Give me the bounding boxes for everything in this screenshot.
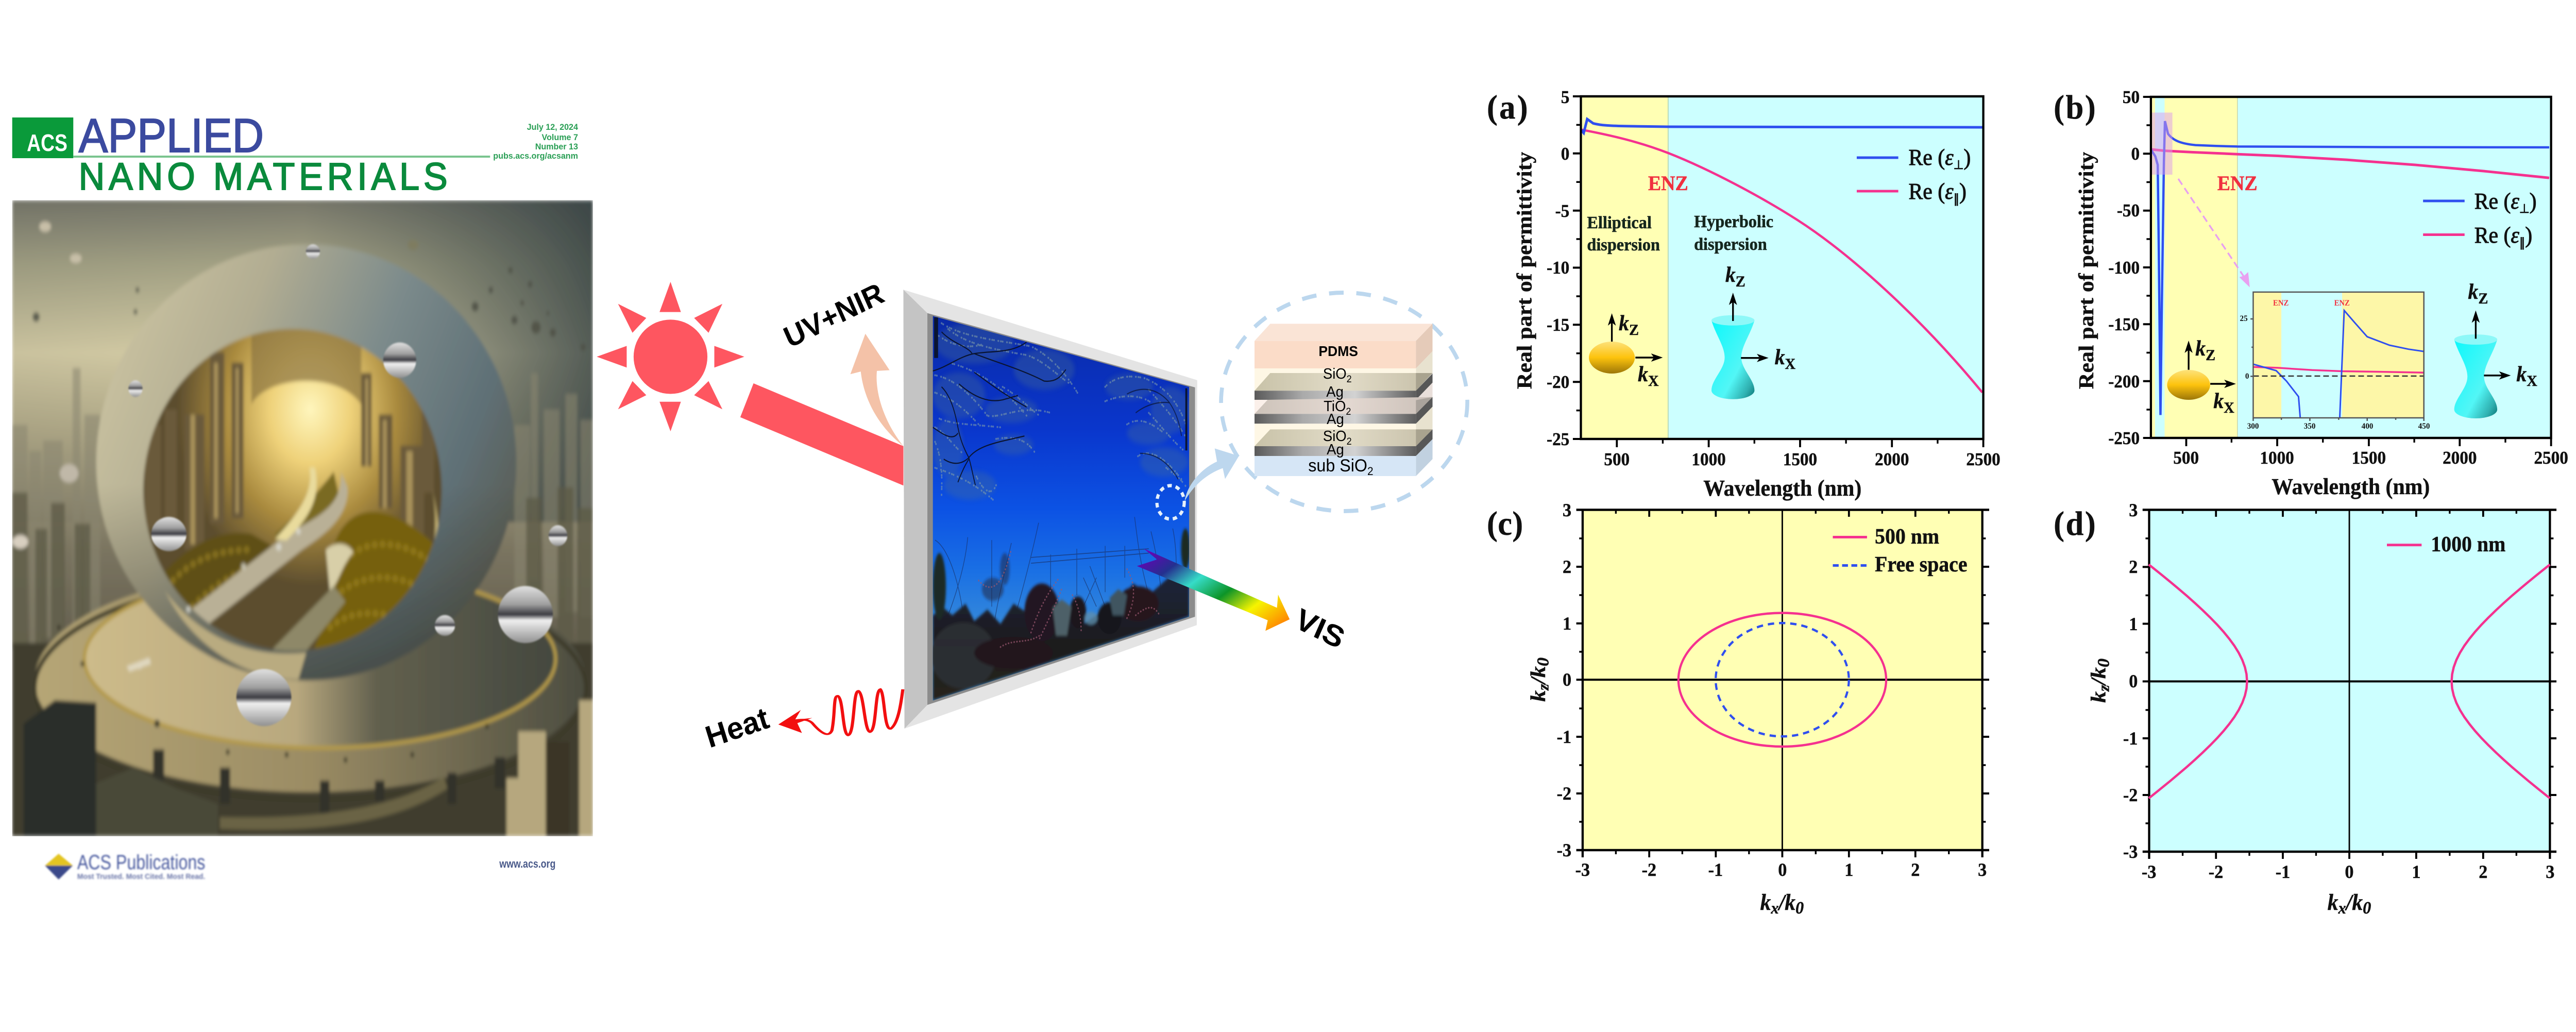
chart d x-axis title: x [2338, 899, 2346, 917]
chart d hyperbola curves [2149, 565, 2550, 798]
chart (b): permittivity vs wavelength with inset [2054, 88, 2568, 499]
chart a x-axis tick labels: 1500 [1783, 450, 1817, 469]
chart a x-axis tick labels: 500 [1604, 450, 1630, 469]
chart d x-axis tick labels: 0 [2345, 861, 2353, 882]
stack layer labels: Ag [1327, 441, 1344, 458]
cover issue details [73, 122, 579, 161]
icon: hyperbolic isofrequency surface, b: k [2516, 362, 2527, 386]
chart a y-axis tick labels [1547, 88, 1569, 449]
chart d legend: 1000 nm [2431, 532, 2505, 556]
chart b y-axis tick labels [2108, 88, 2140, 448]
icon: elliptical isofrequency surface: k [1638, 362, 1648, 386]
tree branches [933, 317, 1187, 485]
chart a x-axis tick labels: 2000 [1875, 450, 1909, 469]
chart a region labels: Hyperbolic [1694, 212, 1773, 231]
chart a legend [1857, 145, 1971, 206]
chart a y-axis tick labels: -15 [1547, 315, 1569, 335]
dashed circle around layer stack [1221, 293, 1467, 511]
label: VIS: VIS [1291, 602, 1350, 655]
stack layer labels: 2 [1346, 406, 1351, 417]
icon: elliptical isofrequency surface: k [1619, 311, 1629, 335]
inset ENZ labels: ENZ [2334, 299, 2350, 308]
chart b frame and ticks [2143, 97, 2551, 446]
chart b y-axis tick labels: -50 [2117, 201, 2140, 221]
label: Heat: Heat [701, 701, 773, 755]
chart d x-axis title: k [2328, 890, 2338, 915]
chart d x-axis tick labels: -2 [2209, 861, 2223, 882]
panel letter b: (b) [2054, 89, 2096, 126]
inset tick labels: 350 [2304, 422, 2316, 431]
icon: elliptical isofrequency surface, b: k [2213, 389, 2224, 413]
icon: elliptical isofrequency surface: Z [1629, 322, 1639, 339]
cover website: www.acs.org [499, 858, 555, 870]
stack layer labels: PDMS [1318, 343, 1358, 359]
chart b curves [2151, 121, 2549, 415]
chart a region labels: dispersion [1694, 234, 1767, 254]
chart d x-axis tick labels: 3 [2546, 861, 2554, 882]
chart a legend: ) [1959, 179, 1967, 204]
arrow: thermal radiation wave [778, 689, 903, 735]
chart a curves [1581, 119, 1982, 393]
chart d y-axis title: /k [2087, 667, 2110, 686]
inset tick labels: 450 [2418, 422, 2430, 431]
chart d x-axis tick labels: 1 [2412, 861, 2420, 882]
icon: hyperbolic isofrequency surface, b: k [2468, 280, 2478, 303]
arrow: zoom to layer stack [1185, 448, 1239, 501]
chart b y-axis title: Real part of permittivity [2075, 151, 2098, 389]
icon: hyperbolic isofrequency surface, b: X [2527, 373, 2537, 390]
chart c y-axis title: k [1527, 690, 1550, 702]
stack layer labels: 2 [1347, 374, 1352, 384]
chart c y-axis tick labels: -1 [1557, 726, 1571, 747]
chart d y-axis tick labels: 1 [2129, 614, 2138, 634]
chart a region labels: dispersion [1587, 235, 1660, 255]
chart a legend: Re (ε [1908, 145, 1954, 170]
chart b y-axis tick labels: -150 [2108, 315, 2140, 334]
icon: hyperbolic isofrequency surface: k [1725, 263, 1736, 286]
panel: device schematic [597, 276, 1467, 755]
icon: hyperbolic isofrequency surface [1711, 263, 1795, 399]
chart a legend: ∥ [1954, 192, 1959, 206]
chart c x-axis tick labels: 3 [1978, 859, 1987, 880]
chart d x-axis tick labels: -1 [2276, 861, 2290, 882]
chart b ENZ label: ENZ [2217, 172, 2258, 195]
icon: elliptical isofrequency surface [1589, 311, 1663, 390]
cover title: NANO MATERIALS: NANO MATERIALS [79, 156, 448, 198]
chart c x-axis tick labels: -3 [1575, 859, 1590, 880]
chart d y-axis tick labels: -1 [2123, 728, 2138, 749]
chart b legend: ∥ [2519, 236, 2525, 250]
chart c y-axis tick labels: 0 [1563, 669, 1571, 690]
chart b y-axis tick labels: 50 [2123, 88, 2140, 107]
chart d y-axis tick labels: -2 [2123, 785, 2138, 805]
cover publisher logo: Most Trusted. Most Cited. Most Read. [77, 873, 205, 881]
chart d y-axis tick labels: 3 [2129, 500, 2138, 520]
highlight: dotted sampling circle [1157, 485, 1184, 519]
chart b highlighted zoom region [2152, 112, 2173, 175]
arrow: transmitted visible light [1137, 549, 1290, 631]
chart a frame and ticks [1573, 96, 1984, 447]
inset ENZ labels [2273, 299, 2350, 308]
cover publisher logo [45, 851, 205, 881]
chart d background [2149, 510, 2550, 852]
chart c y-axis title: 0 [1534, 657, 1552, 666]
chart c y-axis tick labels: 1 [1563, 613, 1571, 634]
chart c x-axis tick labels: -2 [1642, 859, 1656, 880]
chart c background [1583, 510, 1982, 850]
chart c curves [1679, 613, 1886, 747]
chart c y-axis title: /k [1527, 666, 1550, 685]
panel: journal cover [12, 109, 593, 881]
chart b x-axis tick labels: 1500 [2352, 448, 2386, 468]
chart a legend: ⊥ [1954, 158, 1963, 172]
cover illustration: ring, city and metal spheres [12, 200, 593, 836]
bushes and ground [930, 529, 1190, 701]
chart c x-axis tick labels [1575, 859, 1987, 880]
inset tick labels: 300 [2247, 422, 2259, 431]
chart b background bands [2151, 97, 2551, 438]
chart a region labels [1587, 212, 1773, 255]
chart d x-axis tick labels: -3 [2142, 861, 2156, 882]
chart d y-axis tick labels: 2 [2129, 556, 2138, 577]
arrow: incident sunlight beam [740, 383, 903, 485]
icon: elliptical isofrequency surface, b: X [2224, 399, 2234, 416]
chart a y-axis tick labels: 0 [1561, 144, 1569, 164]
chart b dashed callout arrow [2178, 179, 2250, 287]
cover masthead green ACS box: ACS [27, 130, 67, 156]
icon: hyperbolic isofrequency surface: k [1775, 345, 1785, 369]
chart a y-axis title: Real part of permittivity [1513, 151, 1536, 389]
chart d y-axis title: 0 [2094, 658, 2113, 667]
cover issue details: pubs.acs.org/acsanm [493, 151, 578, 161]
chart b x-axis tick labels: 1000 [2260, 448, 2294, 468]
cover publisher logo: ACS Publications [77, 851, 205, 874]
chart c legend: Free space [1875, 552, 1968, 576]
chart a y-axis tick labels: 5 [1561, 88, 1569, 107]
icon: elliptical isofrequency surface: X [1648, 373, 1659, 390]
stack layer labels [1308, 343, 1374, 478]
grasses and wires [935, 517, 1177, 627]
panel letter d: (d) [2054, 505, 2096, 542]
chart b legend: Re (ε [2475, 223, 2519, 248]
chart b legend: Re (ε [2475, 189, 2519, 214]
chart c x-axis title: x [1770, 899, 1779, 917]
chart c y-axis tick labels: 2 [1563, 556, 1571, 577]
chart d x-axis title: /k [2345, 890, 2363, 915]
stack layer labels: sub SiO [1308, 456, 1367, 476]
window photo: trees against blue sky [930, 315, 1192, 702]
panel letter c: (c) [1487, 505, 1523, 542]
chart a region labels: Elliptical [1587, 213, 1652, 232]
window frame [903, 290, 1197, 729]
chart b y-axis tick labels: -250 [2108, 429, 2140, 448]
chart a y-axis tick labels: -5 [1555, 201, 1569, 221]
chart b legend: ) [2525, 223, 2532, 248]
chart c x-axis tick labels: 0 [1778, 859, 1787, 880]
chart b x-axis tick labels: 2000 [2443, 448, 2477, 468]
chart a x-axis tick labels [1604, 450, 2001, 469]
chart c y-axis tick labels [1557, 500, 1571, 860]
chart c legend [1833, 525, 1968, 576]
chart b y-axis tick labels: 0 [2131, 144, 2140, 164]
chart b y-axis tick labels: -200 [2108, 372, 2140, 392]
inset ENZ labels: ENZ [2273, 299, 2289, 308]
chart d axes and ticks [2143, 510, 2556, 859]
stack layer labels: SiO [1323, 365, 1347, 382]
label: UV+NIR: UV+NIR [779, 276, 889, 354]
icon: sun [597, 282, 744, 431]
chart a ENZ label: ENZ [1648, 172, 1688, 195]
chart b legend [2423, 189, 2537, 250]
chart b inset [2240, 292, 2430, 431]
chart c x-axis tick labels: -1 [1708, 859, 1723, 880]
icon: hyperbolic isofrequency surface, b: Z [2478, 290, 2488, 307]
chart c y-axis tick labels: -3 [1557, 840, 1571, 860]
inset tick labels: 0 [2245, 372, 2249, 381]
chart d y-axis title: z [2095, 684, 2112, 692]
icon: elliptical isofrequency surface, b [2167, 336, 2236, 416]
chart b legend: ⊥ [2519, 202, 2530, 216]
chart d x-axis tick labels: 2 [2479, 861, 2487, 882]
chart b y-axis tick labels: -100 [2108, 258, 2140, 278]
chart b x-axis tick labels: 2500 [2534, 448, 2568, 468]
cover issue details: Volume 7 [542, 132, 578, 142]
chart a x-axis tick labels: 1000 [1691, 450, 1726, 469]
chart b x-axis title: Wavelength (nm) [2272, 475, 2430, 499]
stack layer labels: SiO [1323, 427, 1347, 444]
chart a legend: ) [1963, 145, 1971, 170]
inset tick labels [2240, 314, 2430, 431]
chart c axes and ticks [1577, 510, 1989, 857]
stack layer labels: Ag [1327, 410, 1344, 427]
chart c x-axis title: /k [1777, 890, 1796, 915]
chart (c): elliptical dispersion at 500 nm [1487, 500, 1989, 918]
chart d x-axis tick labels [2142, 861, 2554, 882]
chart c y-axis tick labels: 3 [1563, 500, 1571, 520]
chart a background bands [1581, 96, 1984, 439]
cover masthead green ACS box [12, 117, 73, 158]
chart c y-axis tick labels: -2 [1557, 783, 1571, 804]
chart b x-axis tick labels [2173, 448, 2568, 468]
multilayer stack [1255, 324, 1433, 478]
stack layer labels: Ag [1326, 383, 1344, 400]
cover title: APPLIED: APPLIED [79, 109, 264, 163]
icon: hyperbolic isofrequency surface: X [1785, 356, 1795, 373]
chart d y-axis title: k [2087, 691, 2110, 703]
icon: hyperbolic isofrequency surface: Z [1736, 273, 1745, 290]
arrow: reflected UV and NIR [851, 334, 903, 446]
stack layer labels: 2 [1367, 465, 1374, 478]
chart a x-axis tick labels: 2500 [1966, 450, 2001, 469]
chart d y-axis tick labels: 0 [2129, 671, 2138, 691]
blossom speckle [979, 549, 1160, 647]
chart d y-axis tick labels [2123, 500, 2138, 862]
chart b x-axis tick labels: 500 [2173, 448, 2199, 468]
chart a y-axis tick labels: -10 [1547, 258, 1569, 278]
tree foliage speckle [935, 323, 1187, 502]
chart a legend: Re (ε [1908, 179, 1954, 204]
chart a y-axis tick labels: -20 [1547, 373, 1569, 392]
chart c x-axis title: 0 [1795, 898, 1804, 918]
chart a x-axis title: Wavelength (nm) [1703, 476, 1861, 501]
icon: elliptical isofrequency surface, b: k [2195, 336, 2206, 360]
cover issue details: July 12, 2024 [527, 122, 579, 132]
chart c legend: 500 nm [1875, 525, 1939, 548]
chart (a): permittivity vs wavelength, thin Ag film stack [1487, 88, 2001, 501]
chart a y-axis tick labels: -25 [1547, 430, 1569, 449]
tree foliage haze [933, 323, 1190, 500]
inset tick labels: 25 [2240, 314, 2248, 323]
chart c x-axis title: k [1760, 890, 1771, 915]
chart (d): hyperbolic dispersion at 1000 nm [2054, 500, 2556, 918]
stack layer labels: 2 [1347, 436, 1352, 447]
inset tick labels: 400 [2362, 422, 2374, 431]
icon: hyperbolic isofrequency surface, b [2454, 280, 2537, 418]
chart d y-axis tick labels: -3 [2123, 841, 2138, 862]
chart b legend: ) [2530, 189, 2537, 214]
chart d x-axis title: 0 [2363, 898, 2371, 918]
icon: elliptical isofrequency surface, b: Z [2206, 347, 2215, 364]
chart c x-axis tick labels: 1 [1844, 859, 1853, 880]
panel letter a: (a) [1487, 89, 1528, 126]
cover issue details: Number 13 [535, 142, 578, 151]
stack layer labels: TiO [1324, 397, 1346, 414]
chart c x-axis tick labels: 2 [1911, 859, 1920, 880]
chart c y-axis title: z [1534, 683, 1552, 691]
